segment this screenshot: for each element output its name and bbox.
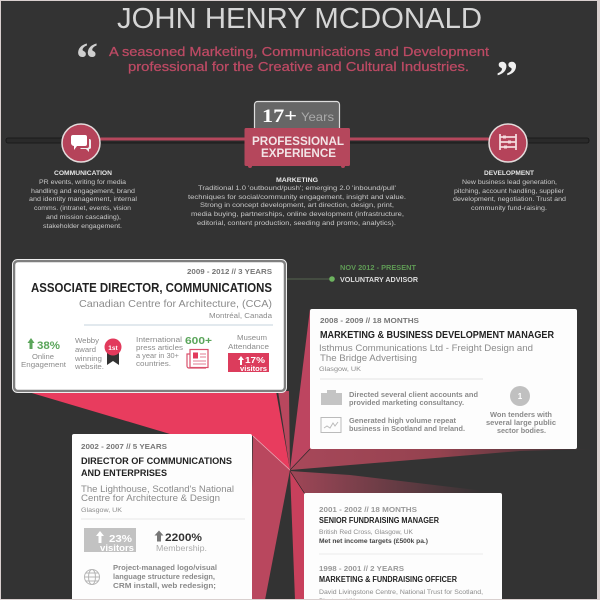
years badge: [254, 102, 340, 134]
icon: opening quote mark: “: [76, 34, 98, 83]
card header: MARKETING & BUSINESS DEVELOPMENT MANAGER: [320, 329, 554, 341]
tagline text: A seasoned Marketing, Communications and Development: [109, 44, 489, 59]
icon: ribbon badge: 1st: [108, 345, 119, 352]
professional experience banner: PROFESSIONAL: [252, 136, 344, 148]
text block: communication: COMMUNICATION: [54, 170, 112, 177]
stat: museum attendance: [228, 335, 269, 373]
card header: 2009 - 2012 // 3 YEARS: [187, 269, 272, 276]
role: marketing and fundraising officer: [319, 564, 483, 600]
professional experience banner: EXPERIENCE: [261, 148, 336, 160]
role: senior fundraising manager: Met net income targets (£500k pa.): [319, 538, 428, 545]
stat: international press: a year in 30+: [136, 353, 179, 360]
voluntary advisor marker: NOV 2012 - PRESENT: [340, 265, 417, 272]
text block: marketing: MARKETING: [276, 177, 318, 184]
stat: international press: countries.: [136, 361, 171, 368]
stat: museum attendance: 17%: [245, 356, 265, 365]
text: project managed: CRM install, web redesign;: [113, 581, 216, 590]
stat: visitors ticket: 23%: [109, 534, 132, 545]
card header: [31, 269, 273, 325]
role: senior fundraising manager: 2001 - 2002 // 18 MONTHS: [319, 505, 417, 514]
card header: Canadian Centre for Architecture, (CCA): [79, 298, 272, 310]
voluntary advisor marker: [286, 265, 418, 284]
text: client accounts: Directed several client accounts and: [349, 390, 478, 399]
text: repeat business: Generated high volume repeat: [349, 416, 456, 425]
text: client accounts: [349, 390, 478, 407]
timeline track: [6, 138, 589, 143]
text block: communication: and identity management, internal: [29, 196, 137, 203]
stat: online engagement: Online: [32, 354, 54, 361]
stat: online engagement: [21, 338, 66, 369]
card header: 2002 - 2007 // 5 YEARS: [81, 444, 167, 451]
text block: development: development, negotiation. Trust and: [453, 196, 567, 203]
text: project managed: language structure redesign,: [113, 572, 215, 581]
card header: ASSOCIATE DIRECTOR, COMMUNICATIONS: [31, 281, 272, 295]
text: repeat business: business in Scotland and Ireland.: [349, 424, 465, 433]
stat: webby award: winning: [74, 356, 102, 363]
stat: museum attendance: visitors: [240, 366, 267, 373]
stat: international press: International: [136, 337, 183, 344]
tagline text: professional for the Creative and Cultural Industries.: [128, 59, 469, 74]
text block: marketing: [188, 177, 406, 227]
radial burst connecting roles: [25, 309, 590, 600]
text block: development: community fund-raising.: [471, 205, 547, 212]
panel: associate director card: [12, 260, 286, 392]
card header: Montréal, Canada: [209, 313, 272, 320]
stat: webby award: award: [75, 347, 96, 354]
years badge: 17+: [262, 106, 297, 127]
text: tenders: sector bodies.: [497, 426, 546, 435]
stat: international press: press articles: [136, 345, 184, 352]
text block: communication: and mission cascading),: [46, 214, 121, 221]
icon: medal number one: [510, 386, 530, 406]
text block: development: New business lead generation,: [462, 179, 557, 186]
stat: webby award: website.: [74, 364, 104, 371]
years badge: Years: [301, 110, 334, 124]
text block: marketing: Traditional 1.0 'outbound/push'; emerging 2.0 'inbound/pull': [198, 185, 396, 192]
panel: fundraising card: [304, 493, 502, 600]
stat: online engagement: Engagement: [21, 362, 66, 369]
stat: international press: 600+: [185, 336, 212, 347]
text: repeat business: [349, 416, 465, 433]
card header: [81, 444, 245, 519]
stat: visitors ticket: visitors: [100, 543, 134, 553]
icon: briefcase: [321, 390, 342, 405]
text block: development: [453, 170, 567, 212]
text block: communication: [29, 170, 137, 230]
card header: DIRECTOR OF COMMUNICATIONS: [81, 456, 232, 467]
card header: Centre for Architecture & Design: [81, 493, 220, 504]
stat: webby award: Webby: [75, 338, 100, 345]
text: tenders: Won tenders with: [490, 410, 552, 419]
stat: visitors ticket: [84, 528, 136, 553]
panel: marketing manager card: [310, 309, 577, 449]
text: project managed: [113, 563, 217, 590]
stat: international press: [136, 336, 212, 368]
icon: communication speech bubbles: [62, 124, 100, 162]
card header: The Lighthouse, Scotland's National: [81, 484, 234, 495]
text: project managed: Project-managed logo/visual: [113, 563, 217, 572]
text block: communication: PR events, writing for media: [39, 179, 127, 186]
icon: globe: [84, 570, 100, 584]
card header: 2008 - 2009 // 18 MONTHS: [320, 318, 419, 325]
text: tenders: several large public: [486, 418, 556, 427]
role: marketing and fundraising officer: MARKETING & FUNDRAISING OFFICER: [319, 575, 457, 584]
text block: marketing: Strong in concept development, art direction, design, print,: [200, 202, 394, 209]
stat: membership: [154, 530, 207, 553]
text block: communication: stakeholder engagement.: [43, 223, 122, 230]
tagline text: [109, 44, 489, 74]
stat: museum attendance: Attendance: [228, 344, 269, 351]
professional experience banner: [244, 128, 350, 168]
card header: AND ENTERPRISES: [81, 468, 167, 479]
icon: line chart: [321, 418, 341, 432]
card header: The Bridge Advertising: [320, 353, 417, 364]
stat: membership: 2200%: [165, 532, 202, 544]
stat: online engagement: 38%: [37, 340, 60, 352]
text block: marketing: editorial, content production, seeding and promo, analytics).: [197, 220, 396, 227]
text: client accounts: provided marketing consultancy.: [349, 398, 464, 407]
card header: [319, 318, 554, 379]
role: senior fundraising manager: SENIOR FUNDRAISING MANAGER: [319, 516, 439, 525]
text block: communication: handling and engagement, brand: [31, 188, 136, 195]
role: senior fundraising manager: British Red Cross, Glasgow, UK: [319, 529, 414, 536]
card header: Glasgow, UK: [81, 507, 123, 514]
card header: Glasgow, UK: [319, 366, 362, 373]
stat: membership: Membership.: [156, 544, 207, 553]
text block: marketing: techniques for social/community engagement, insight and value.: [188, 194, 406, 201]
panel: director of communications card: [72, 434, 252, 600]
text block: development: pitching, account handling, supplier: [454, 188, 564, 195]
stat: webby award: [74, 338, 122, 371]
text block: marketing: media buying, partnerships, online development (infrastructure,: [191, 211, 404, 218]
voluntary advisor marker: VOLUNTARY ADVISOR: [340, 277, 418, 284]
role: marketing and fundraising officer: 1998 - 2001 // 2 YEARS: [319, 564, 404, 573]
tagline quote: [76, 34, 518, 101]
card header: Isthmus Communications Ltd - Freight Design and: [319, 343, 533, 354]
text: tenders: [486, 410, 556, 435]
icon: development abacus: [489, 124, 527, 162]
role: senior fundraising manager: [319, 505, 439, 545]
icon: medal number one: 1: [518, 392, 523, 401]
text block: communication: comms. (intranet, events, vision: [34, 205, 132, 212]
icon: newspaper: [187, 350, 208, 368]
stat: museum attendance: Museum: [237, 335, 267, 342]
text block: development: DEVELOPMENT: [484, 170, 534, 177]
role: marketing and fundraising officer: David Livingstone Centre, National Trust for Scotland,: [319, 589, 483, 596]
icon: closing quote mark: ”: [496, 52, 518, 101]
title: JOHN HENRY MCDONALD: [117, 3, 482, 35]
